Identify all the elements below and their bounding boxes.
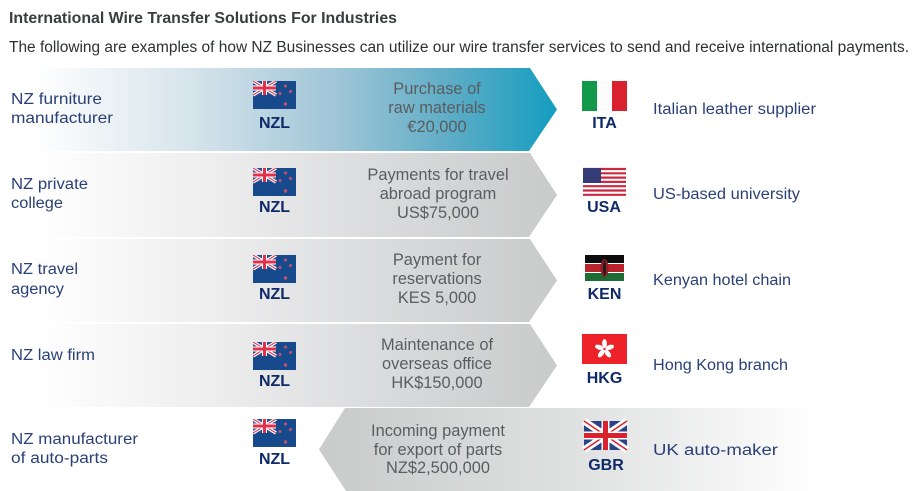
icon: NZ flag — [253, 342, 296, 370]
row: furniture manufacturer — [11, 68, 816, 151]
subtitle: The following are examples of how NZ Businesses can utilize our wire transfer services to send and receive international payments. — [9, 39, 909, 56]
NZL code: NZL — [259, 286, 290, 303]
NZL code: NZL — [259, 451, 290, 468]
arrow band: blue outgoing — [35, 68, 557, 151]
sender label: college — [11, 195, 63, 212]
sender label: NZ law firm — [11, 347, 95, 364]
payment text: reservations — [392, 270, 482, 288]
recipient label: UK auto-maker — [653, 442, 778, 459]
payment text: Payment for — [393, 251, 482, 269]
row: private college — [11, 153, 800, 237]
NZL code: NZL — [259, 199, 290, 216]
payment text: abroad program — [380, 185, 496, 203]
icon: UK flag — [584, 421, 627, 450]
payment text: raw materials — [388, 99, 486, 117]
arrow band: gray outgoing — [35, 324, 557, 407]
KEN code: KEN — [588, 286, 621, 303]
GBR code: GBR — [588, 457, 624, 474]
icon: Italy flag — [582, 81, 627, 111]
row: travel agency — [11, 239, 791, 322]
sender label — [11, 176, 88, 212]
recipient label: Hong Kong branch — [653, 357, 788, 374]
payment text: KES 5,000 — [398, 289, 476, 307]
payment text: Incoming payment — [371, 422, 505, 440]
sender label: agency — [11, 281, 64, 298]
recipient label: US-based university — [653, 186, 800, 203]
USA code: USA — [587, 199, 621, 216]
arrow band: gray outgoing — [35, 239, 557, 322]
sender label: of auto-parts — [11, 450, 108, 467]
sender label: NZ private — [11, 176, 88, 193]
arrow band: gray outgoing — [35, 153, 557, 237]
sender label: manufacturer — [11, 110, 113, 127]
icon: NZ flag — [253, 255, 296, 283]
payment text: €20,000 — [407, 118, 467, 136]
payment text: NZ$2,500,000 — [386, 459, 490, 477]
HKG code: HKG — [587, 370, 622, 387]
sender label — [11, 261, 78, 298]
icon: Hong Kong flag — [582, 334, 627, 364]
arrow band: gray incoming — [319, 408, 820, 491]
NZL code: NZL — [259, 373, 290, 390]
icon: USA flag — [583, 168, 626, 196]
sender label — [11, 431, 138, 467]
sender label: NZ furniture — [11, 91, 102, 108]
sender label: NZ manufacturer — [11, 431, 138, 448]
ITA code: ITA — [592, 115, 617, 132]
payment text: Purchase of — [393, 80, 481, 98]
icon: NZ flag — [253, 81, 296, 109]
payment text: for export of parts — [374, 441, 502, 459]
icon: NZ flag — [253, 168, 296, 196]
icon: NZ flag — [253, 419, 296, 447]
recipient label: Kenyan hotel chain — [653, 272, 791, 289]
sender label — [11, 91, 113, 127]
title: International Wire Transfer Solutions For Industries — [9, 10, 397, 27]
payment text: Maintenance of — [381, 336, 493, 354]
row: auto-parts manufacturer — [11, 408, 820, 491]
recipient label: Italian leather supplier — [653, 101, 816, 118]
row: law firm — [11, 324, 788, 407]
payment text: HK$150,000 — [391, 374, 483, 392]
NZL code: NZL — [259, 115, 290, 132]
payment text: US$75,000 — [397, 204, 479, 222]
icon: Kenya flag — [585, 255, 624, 281]
payment text: Payments for travel — [367, 166, 509, 184]
payment text: overseas office — [382, 355, 492, 373]
sender label: NZ travel — [11, 261, 78, 278]
